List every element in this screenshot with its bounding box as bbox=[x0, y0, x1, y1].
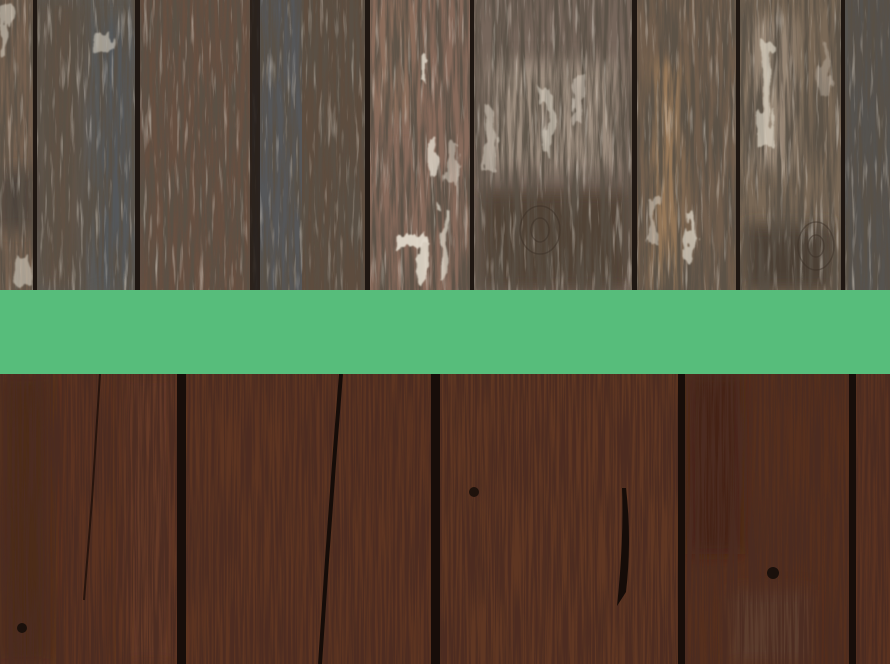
top planks bbox=[0, 0, 890, 290]
bottom planks bbox=[0, 374, 890, 664]
bottom wood grain bbox=[0, 374, 890, 664]
wood cracks and knots, bottom bbox=[17, 374, 779, 664]
panel: dark brown wood, bottom bbox=[0, 374, 890, 664]
bottom plank shading bbox=[0, 374, 810, 664]
bottom plank gaps bbox=[177, 374, 856, 664]
top plank shading bbox=[0, 0, 835, 290]
top plank gaps bbox=[33, 0, 845, 290]
flaking paint patches bbox=[2, 5, 829, 284]
top wood grain bbox=[0, 0, 890, 290]
panel: weathered wood, top bbox=[0, 0, 890, 290]
flaking white paint texture bbox=[0, 0, 890, 290]
wood knots, top bbox=[520, 206, 834, 270]
green band bbox=[0, 290, 890, 374]
